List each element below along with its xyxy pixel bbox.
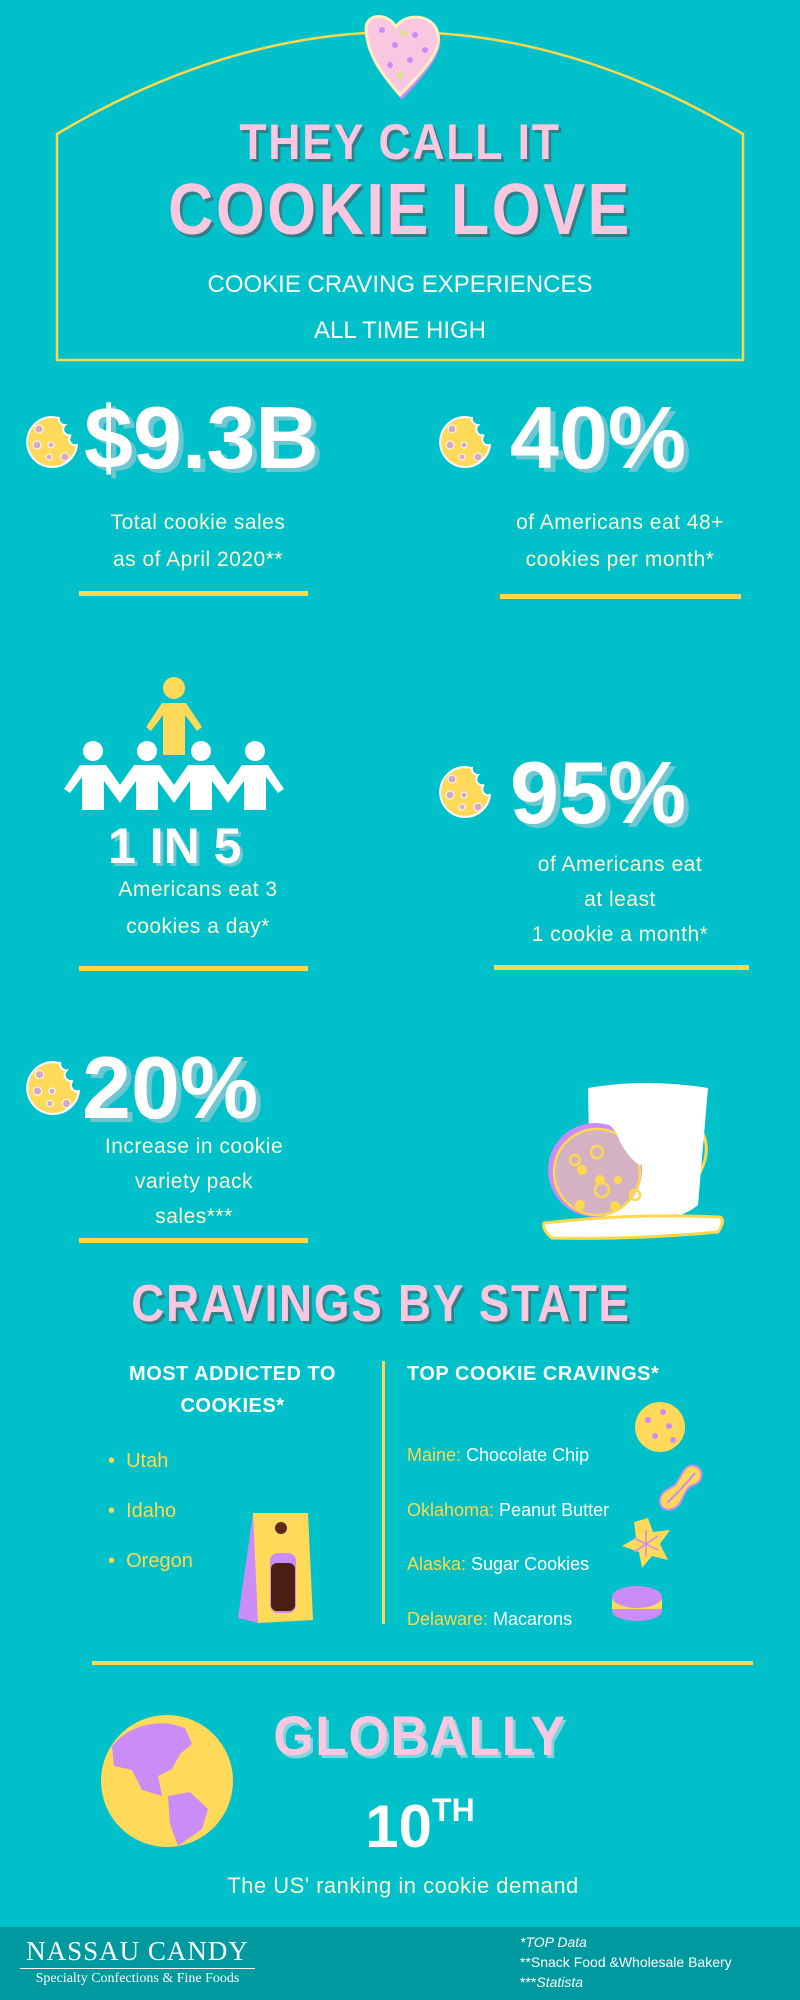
title: cookie love: COOKIE LOVE: [168, 170, 632, 250]
caption: at least 1 cookie: 1 cookie a month*: [532, 923, 708, 946]
sources: [520, 1934, 732, 1990]
icon: cookie: [26, 416, 78, 468]
icon: cookie: [439, 766, 492, 818]
divider: vertical: [382, 1361, 385, 1624]
stat: 95%: [439, 743, 689, 842]
caption: 3 cookies a day: Americans eat 3: [118, 878, 278, 901]
heading: most addicted: COOKIES*: [180, 1395, 285, 1417]
icon: star sugar cookie: [622, 1518, 670, 1568]
caption: ranking: The US' ranking in cookie demand: [227, 1873, 579, 1898]
illustration: mug and cookie: [542, 1083, 724, 1240]
caption: 48+ cookies: cookies per month*: [526, 548, 714, 571]
icon: heart cookie: [364, 15, 440, 100]
list: states: • Utah: [108, 1450, 168, 1472]
list: cravings: [407, 1445, 609, 1628]
sources: **Snack Food &Wholesale Bakery: [520, 1954, 732, 1970]
sources: *TOP Data: [520, 1934, 587, 1950]
caption: at least 1 cookie: of Americans eat: [538, 853, 702, 876]
caption: total sales: Total cookie sales: [111, 511, 285, 534]
icon: cookie bag: [238, 1513, 313, 1623]
logo: nassau candy: NASSAU CANDY: [26, 1936, 249, 1966]
subtitle: COOKIE CRAVING EXPERIENCES: [208, 271, 592, 298]
icon: people: [64, 677, 284, 810]
number: 95%: [510, 743, 686, 842]
caption: variety pack: [105, 1135, 283, 1228]
heading: cravings by state: CRAVINGS BY STATE: [131, 1275, 631, 1333]
title: they call it: THEY CALL IT: [239, 114, 561, 170]
list: states: • Idaho: [108, 1500, 176, 1522]
list: states: [108, 1450, 193, 1572]
caption: 48+ cookies: [516, 511, 724, 571]
icon: chocolate chip: [635, 1402, 685, 1452]
icon: cookie: [26, 1061, 80, 1115]
footer: [0, 1927, 800, 2000]
caption: at least 1 cookie: [532, 853, 708, 946]
stat: $9.3B: [26, 388, 320, 487]
caption: variety pack: variety pack: [135, 1170, 253, 1193]
subtitle: [208, 271, 592, 344]
subtitle: ALL TIME HIGH: [314, 317, 486, 344]
stat: 40%: [439, 388, 689, 487]
list: cravings: Delaware: Macarons: [407, 1608, 572, 1628]
panel: most addicted: [108, 1363, 336, 1623]
logo: nassau candy: [20, 1936, 255, 1986]
number: $9.3B: [84, 388, 319, 487]
panel: top cookie cravings: [407, 1363, 703, 1628]
icon: peanut: [659, 1464, 703, 1511]
caption: 48+ cookies: of Americans eat 48+: [516, 511, 724, 534]
caption: total sales: [111, 511, 285, 571]
number: 40%: [510, 388, 686, 487]
caption: 3 cookies a day: [118, 878, 278, 938]
caption: at least 1 cookie: at least: [584, 888, 656, 911]
heading: most addicted: [129, 1363, 336, 1417]
heading: top cravings: TOP COOKIE CRAVINGS*: [407, 1363, 659, 1385]
number: 20%: [82, 1038, 258, 1137]
heading: most addicted: MOST ADDICTED TO: [129, 1363, 336, 1385]
caption: 3 cookies a day: cookies a day*: [126, 915, 270, 938]
stat: 10th: 10TH: [365, 1792, 475, 1860]
list: cravings: Alaska: Sugar Cookies: [407, 1554, 589, 1574]
list: cravings: Maine: Chocolate Chip: [407, 1445, 589, 1465]
caption: total sales: as of April 2020**: [113, 548, 283, 571]
heading: globally: GLOBALLY: [273, 1704, 567, 1767]
frame: title arch: [56, 32, 744, 362]
logo: nassau candy: Specialty Confections & Fine Foods: [36, 1971, 239, 1986]
icon: macaron: [612, 1586, 662, 1621]
list: cravings: Oklahoma: Peanut Butter: [407, 1500, 609, 1520]
stat: 1 in 5: 1 IN 5: [108, 818, 241, 874]
icon: cookie: [439, 416, 492, 468]
stat: 20%: [26, 1038, 261, 1137]
sources: ***Statista: [520, 1974, 583, 1990]
caption: variety pack: Increase in cookie: [105, 1135, 283, 1158]
list: states: • Oregon: [108, 1550, 193, 1572]
caption: variety pack: sales***: [155, 1205, 233, 1228]
icon: globe: [101, 1715, 233, 1847]
